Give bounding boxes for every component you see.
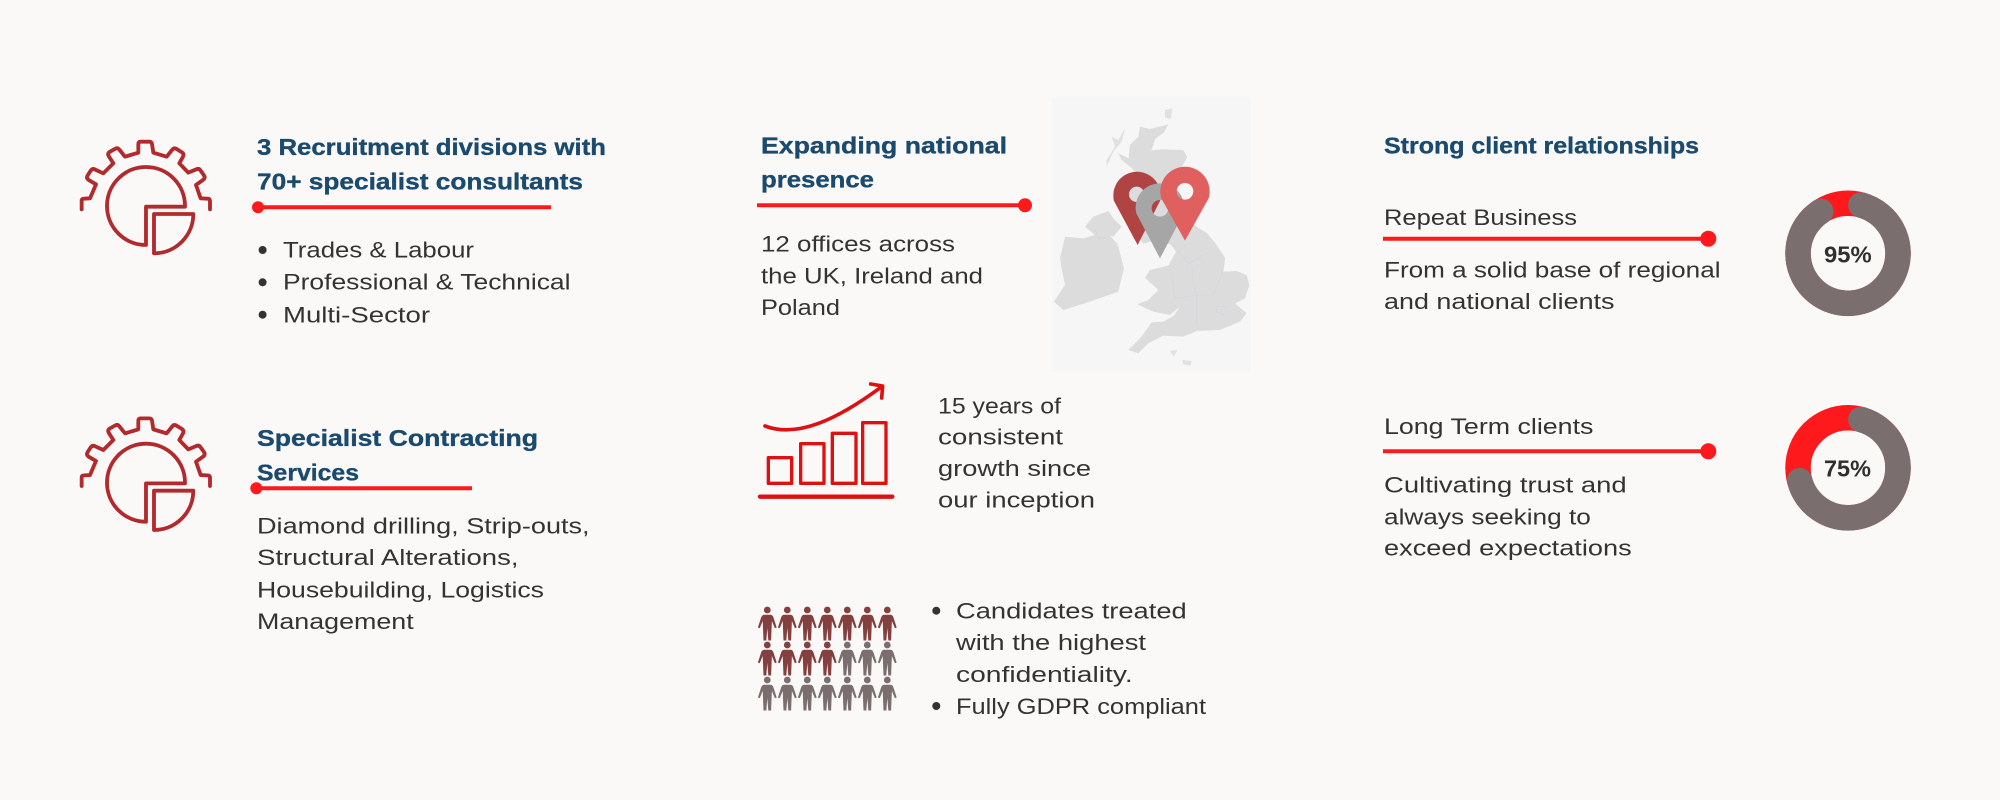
- heading: national presence: presence: [761, 167, 874, 193]
- text: long term clients: Cultivating trust and: [1384, 473, 1627, 498]
- bullet list: candidates and GDPR: confidentiality.: [956, 662, 1133, 687]
- text: fifteen years of growth: our inception: [938, 487, 1095, 512]
- text: long term clients: always seeking to: [1384, 504, 1591, 529]
- text: long term clients: exceed expectations: [1384, 536, 1632, 561]
- text: repeat business: From a solid base of regional: [1384, 257, 1720, 282]
- bullet list: divisions: Multi-Sector: [283, 302, 430, 327]
- underline: repeat business: [1383, 231, 1716, 247]
- donut chart: 75%: [1798, 418, 1898, 518]
- donut chart: 95%: 95%: [1824, 242, 1872, 268]
- panel: client relationships: [1383, 132, 1898, 561]
- donut chart: 75%: 75%: [1824, 456, 1871, 482]
- text: offices: the UK, Ireland and: [761, 263, 983, 288]
- panel: national presence: [757, 97, 1251, 372]
- heading: client relationships: Strong client relationships: [1384, 132, 1699, 158]
- heading underline: [250, 482, 472, 494]
- text: offices: [761, 232, 983, 320]
- icon: dark red pin: [1113, 172, 1161, 245]
- bullet list: candidates and GDPR: [932, 598, 1206, 719]
- bullet list: candidates and GDPR: Candidates treated: [956, 598, 1187, 623]
- panel: specialist contracting: [82, 418, 590, 634]
- map: Great Britain: [1118, 124, 1249, 353]
- map: UK and Ireland with location pins: [1052, 97, 1251, 372]
- heading: recruitment divisions: 70+ specialist consultants: [257, 168, 583, 194]
- text: offices: Poland: [761, 295, 840, 320]
- panel: recruitment divisions: [82, 134, 606, 327]
- icon: gear with pie chart: [82, 142, 210, 253]
- text: contracting services: Housebuilding, Logistics: [257, 577, 544, 602]
- icon: grey pin: [1136, 183, 1184, 258]
- text: contracting services: Management: [257, 609, 414, 634]
- bullet list: candidates and GDPR: with the highest: [955, 630, 1146, 655]
- underline: long term clients: [1383, 443, 1716, 459]
- bullet list: divisions: [259, 237, 570, 327]
- map: Scottish and southern islands: [1107, 108, 1192, 366]
- bullet list: divisions: Trades & Labour: [283, 237, 474, 262]
- text: fifteen years of growth: growth since: [938, 456, 1091, 481]
- text: fifteen years of growth: [938, 393, 1095, 512]
- donut chart: 95%: [1798, 203, 1898, 303]
- heading: specialist contracting: Services: [257, 460, 359, 486]
- map: Ireland: [1054, 211, 1124, 310]
- text: long term clients: [1384, 473, 1632, 561]
- icon: coral pin: [1160, 167, 1210, 241]
- icon: growth bar chart with arrow: [760, 384, 892, 497]
- panel: confidentiality: [758, 598, 1206, 719]
- heading: national presence: [761, 132, 1007, 193]
- heading: specialist contracting: Specialist Contracting: [257, 425, 538, 451]
- text: fifteen years of growth: consistent: [938, 424, 1063, 449]
- subheading: repeat business: Repeat Business: [1384, 205, 1577, 230]
- text: contracting services: [257, 513, 590, 634]
- text: contracting services: Diamond drilling, Strip-outs,: [257, 513, 590, 538]
- text: offices: 12 offices across: [761, 232, 955, 257]
- icon: gear with pie chart: [82, 418, 210, 530]
- text: repeat business: [1384, 257, 1720, 314]
- bullet list: candidates and GDPR: Fully GDPR compliant: [956, 694, 1206, 719]
- icon: people pictogram: [758, 607, 897, 710]
- panel: consistent growth: [760, 384, 1095, 512]
- heading underline: [757, 198, 1032, 212]
- heading underline: [252, 201, 551, 213]
- text: fifteen years of growth: 15 years of: [938, 393, 1062, 418]
- heading: specialist contracting: [257, 425, 538, 486]
- heading: recruitment divisions: 3 Recruitment divisions with: [257, 134, 606, 160]
- text: repeat business: and national clients: [1384, 289, 1614, 314]
- bullet list: divisions: Professional & Technical: [283, 269, 570, 294]
- heading: national presence: Expanding national: [761, 132, 1007, 158]
- text: contracting services: Structural Alterations,: [257, 545, 518, 570]
- subheading: long term clients: Long Term clients: [1384, 414, 1593, 439]
- heading: recruitment divisions: [257, 134, 606, 194]
